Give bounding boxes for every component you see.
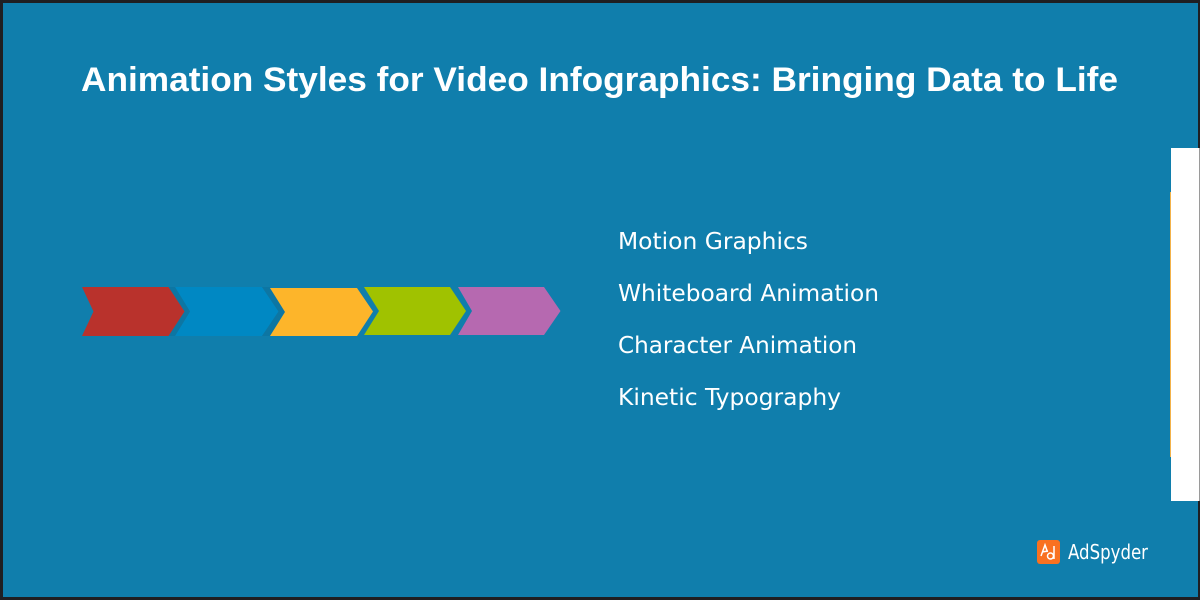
item: motion graphics: Motion Graphics: [618, 227, 808, 255]
chevron: yellow: [270, 288, 373, 336]
chevron: purple: [458, 287, 560, 335]
list of animation styles: [618, 227, 879, 411]
item: whiteboard animation: Whiteboard Animation: [618, 279, 879, 307]
item: character animation: Character Animation: [618, 331, 857, 359]
logo: AdSpyder: [1037, 540, 1149, 564]
chevron: green: [364, 287, 466, 335]
chevron process arrow: [82, 287, 560, 336]
icon: AdSpyder mark: [1037, 540, 1060, 564]
item: kinetic typography: Kinetic Typography: [618, 383, 841, 411]
title: Animation Styles for Video Infographics: Bringing Data to Life: [81, 61, 1118, 99]
chevron: blue: [175, 287, 285, 336]
white side panel: [1170, 148, 1200, 501]
chevron: red: [82, 287, 190, 336]
wordmark: AdSpyder: [1068, 540, 1149, 564]
